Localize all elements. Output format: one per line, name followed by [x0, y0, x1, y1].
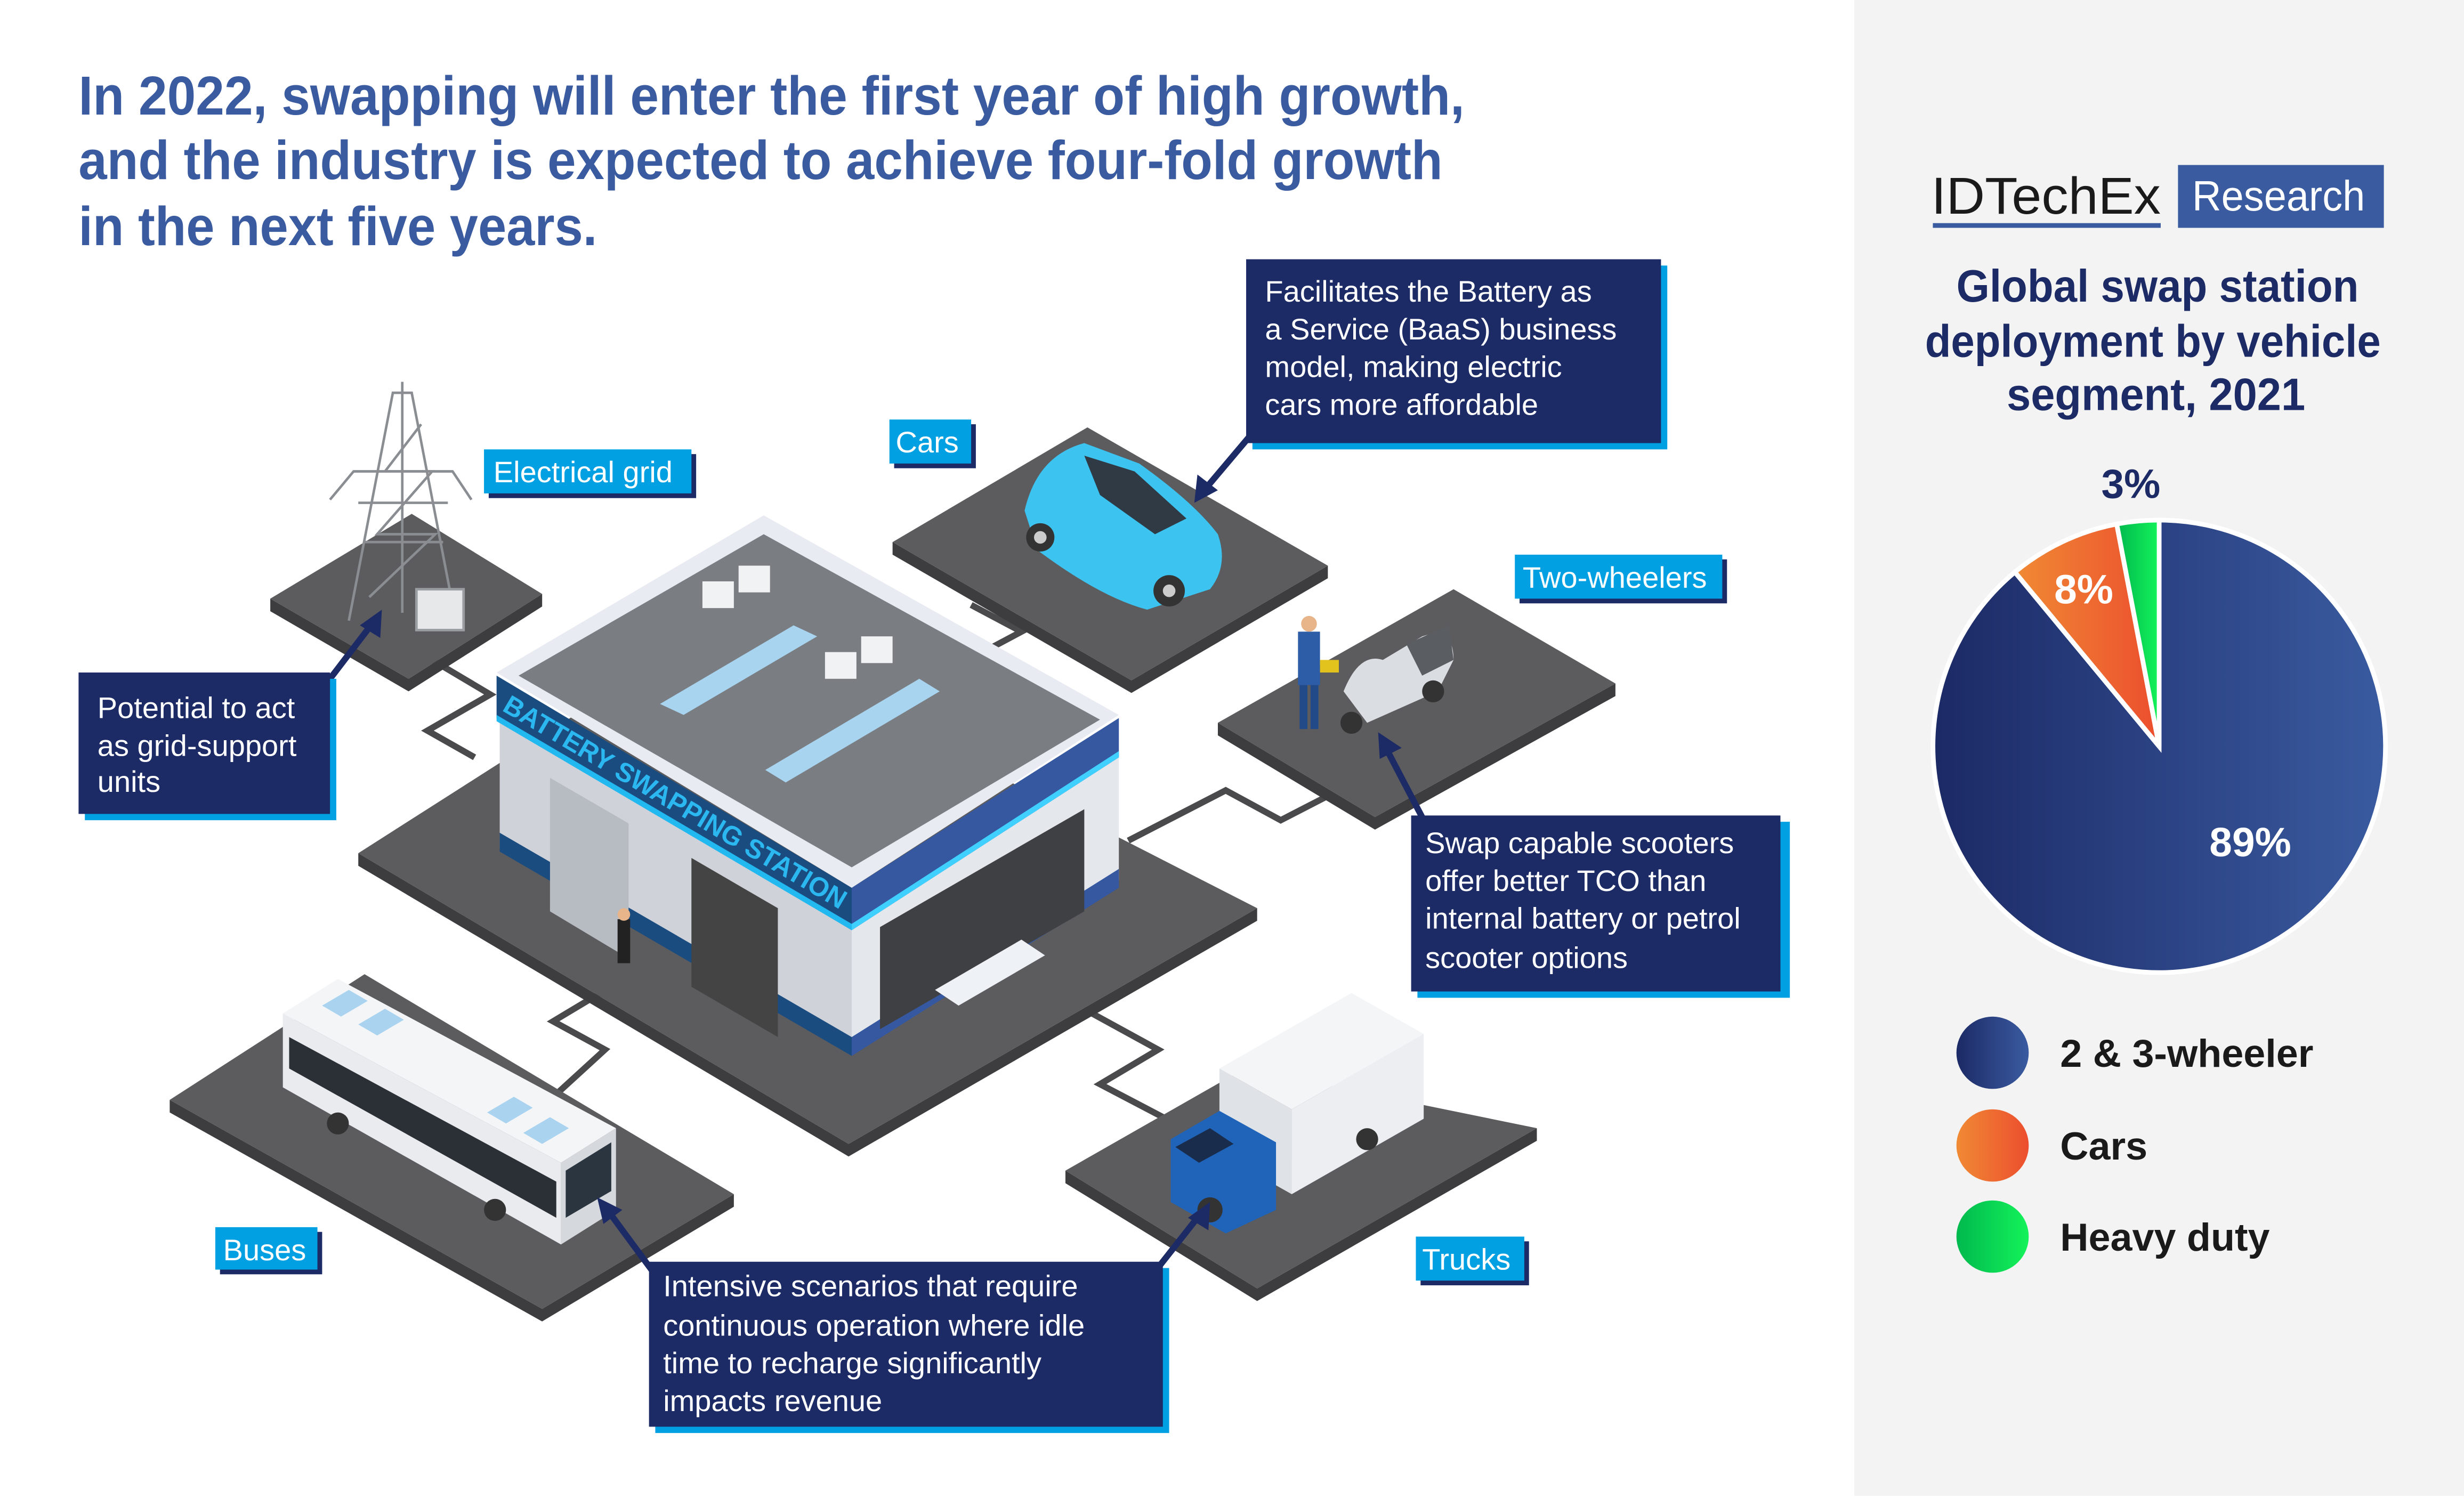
callout: scooters: scooter options [1425, 941, 1628, 974]
logo: IDTechEx Research [1932, 165, 2384, 228]
building: battery swapping station [497, 515, 1119, 1056]
title: In 2022, swapping will enter the first year of high growth, [78, 65, 1465, 126]
platform: cars [893, 427, 1328, 693]
icon: electricity pylon [330, 382, 472, 630]
chart title: segment, 2021 [2007, 370, 2305, 420]
callout: buses and trucks: Intensive scenarios that require [663, 1269, 1078, 1303]
callout: BaaS: model, making electric [1265, 350, 1562, 384]
legend: Heavy duty [2060, 1215, 2270, 1259]
label: electrical grid [484, 449, 696, 498]
pie labels [2054, 462, 2291, 865]
title: in the next five years. [78, 196, 597, 257]
callout: grid support: Potential to act [98, 691, 295, 725]
label: two-wheelers: Two-wheelers [1523, 561, 1707, 594]
callout: scooters: internal battery or petrol [1425, 902, 1741, 935]
callout: BaaS [1246, 260, 1667, 449]
title [78, 65, 1465, 257]
platform: trucks [1065, 1068, 1537, 1301]
icon: truck [1171, 993, 1424, 1234]
pie labels: 89% [2209, 820, 2291, 865]
title: and the industry is expected to achieve four-fold growth [78, 129, 1443, 191]
label: buses [215, 1227, 322, 1274]
callout: scooters [1411, 815, 1790, 998]
callout: buses and trucks: impacts revenue [663, 1384, 882, 1417]
callout: BaaS: cars more affordable [1265, 387, 1538, 421]
legend: Cars [2060, 1124, 2147, 1168]
callout: grid support: as grid-support [98, 728, 297, 762]
platform: electrical grid [270, 514, 542, 691]
label: cars: Cars [896, 425, 959, 459]
label: trucks: Trucks [1422, 1242, 1510, 1276]
sign text: BATTERY SWAPPING STATION [498, 690, 852, 914]
label: cars [890, 419, 976, 468]
callout: buses and trucks: continuous operation where idle [663, 1308, 1085, 1342]
chart title: deployment by vehicle [1925, 316, 2381, 367]
icon: scooter with mechanic [1298, 616, 1453, 734]
label: trucks [1416, 1237, 1529, 1285]
pie chart [1933, 520, 2386, 973]
callout: BaaS: a Service (BaaS) business [1265, 312, 1617, 346]
pie labels: 3% [2102, 462, 2160, 507]
logo: IDTechEx Research: Research [2192, 172, 2365, 220]
label: buses: Buses [223, 1233, 306, 1267]
chart title: Global swap station [1957, 261, 2358, 312]
icon: car [1024, 443, 1222, 610]
label: electrical grid: Electrical grid [494, 455, 673, 489]
callout: BaaS: Facilitates the Battery as [1265, 274, 1592, 308]
callout: scooters: Swap capable scooters [1425, 826, 1734, 860]
logo: IDTechEx Research: IDTechEx [1932, 167, 2161, 225]
callout: grid support: units [98, 765, 160, 798]
arrows [330, 437, 1424, 1273]
platform: central [358, 628, 1257, 1156]
platform: buses [169, 974, 734, 1322]
connector lines [427, 605, 1332, 1119]
callout: buses and trucks [649, 1262, 1169, 1433]
callout: buses and trucks: time to recharge significantly [663, 1346, 1041, 1380]
callout: grid support [78, 672, 336, 820]
legend: 2 & 3-wheeler [2060, 1031, 2313, 1075]
chart title [1925, 261, 2381, 420]
platform: two-wheelers [1218, 589, 1615, 830]
panel: chart background [1854, 0, 2464, 1496]
icon: bus [283, 979, 616, 1244]
pie labels: 8% [2054, 567, 2113, 612]
label: two-wheelers [1515, 555, 1727, 603]
callout: scooters: offer better TCO than [1425, 864, 1706, 897]
legend [1957, 1017, 2313, 1273]
